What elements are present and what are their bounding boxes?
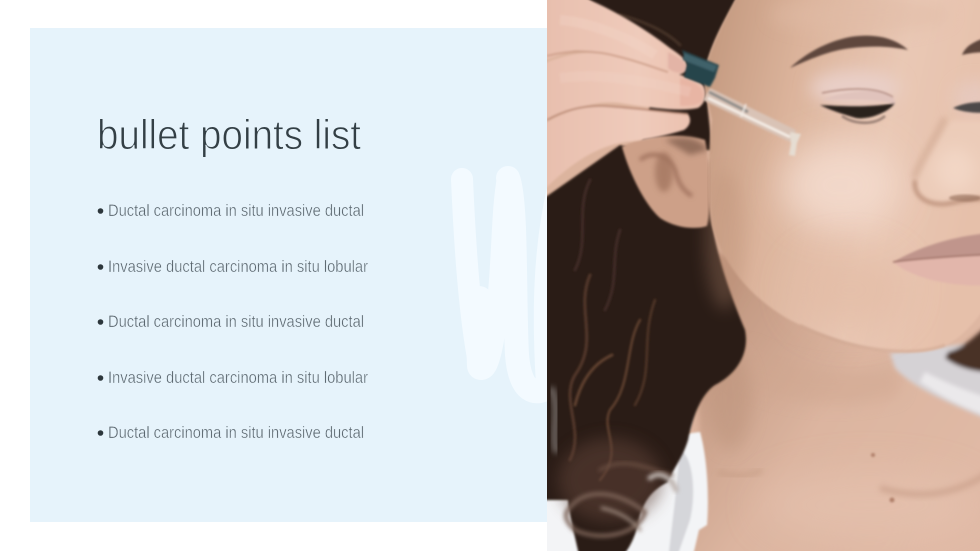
dropper glass tube <box>703 88 801 156</box>
hand with three fingers <box>547 0 706 186</box>
bullet item 1: Ductal carcinoma in situ invasive ductal <box>108 202 364 220</box>
face shading <box>698 66 980 354</box>
neck moles <box>871 453 894 502</box>
hair curls <box>552 15 680 536</box>
middle finger <box>547 52 706 120</box>
dropper cap <box>682 50 719 87</box>
bullet item 2: Invasive ductal carcinoma in situ lobular <box>108 258 369 276</box>
eyebrows <box>790 34 980 68</box>
hair <box>547 0 748 551</box>
photo: woman applying serum with a dropper <box>520 0 980 551</box>
bullet item 3: Ductal carcinoma in situ invasive ductal <box>108 313 364 331</box>
bullet item 5: Ductal carcinoma in situ invasive ductal <box>108 424 364 442</box>
lips <box>893 232 980 286</box>
bullet item 4: Invasive ductal carcinoma in situ lobular <box>108 369 369 387</box>
collar right <box>889 328 980 418</box>
panel: light blue background <box>30 28 547 522</box>
white blouse <box>547 420 710 551</box>
bullet list <box>98 202 369 442</box>
right eye <box>953 102 980 113</box>
lower finger <box>547 106 692 186</box>
upper finger <box>530 0 688 75</box>
face <box>704 0 980 352</box>
fingernails <box>668 53 686 73</box>
brush letter watermark <box>462 178 560 391</box>
neck and chest <box>680 250 980 551</box>
ear <box>622 136 710 228</box>
left eye <box>820 89 895 123</box>
title: bullet points list <box>97 111 361 158</box>
nose <box>914 118 980 204</box>
